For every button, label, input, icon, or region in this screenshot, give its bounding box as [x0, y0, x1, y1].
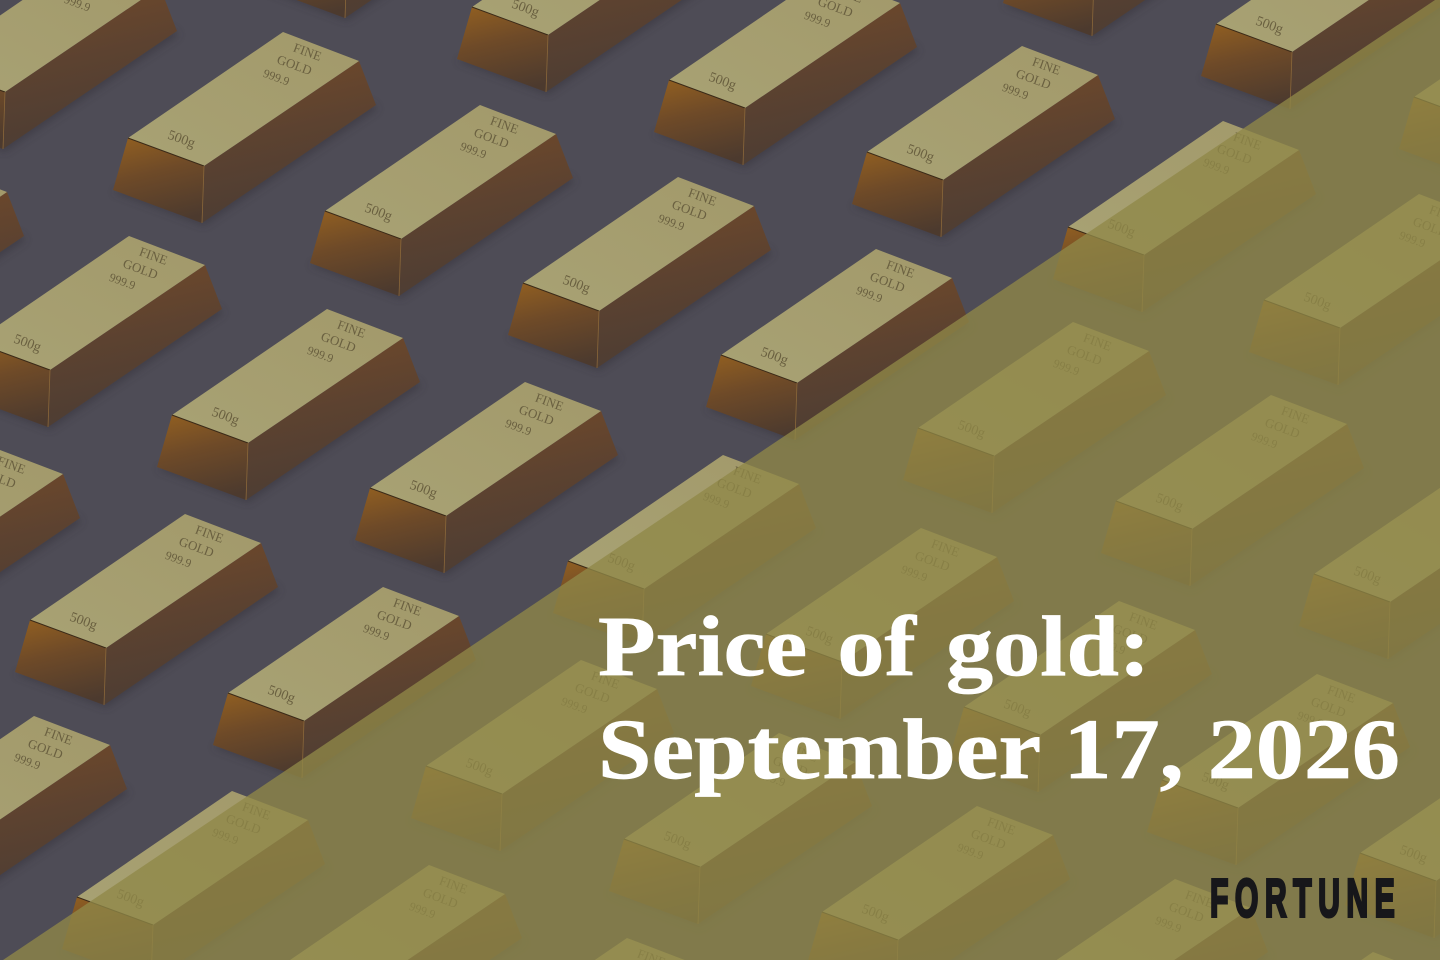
gold bar [1005, 879, 1270, 960]
gold bar [411, 660, 676, 854]
gold bar [259, 865, 524, 960]
gold bar [0, 716, 129, 910]
gold bar [949, 601, 1214, 795]
gold bar [1203, 952, 1440, 960]
gold bar [609, 733, 874, 927]
gold bar [15, 514, 280, 708]
title: Price of gold: [598, 599, 1150, 694]
gold bar [553, 455, 818, 649]
gold bar [706, 249, 971, 443]
gold bar [1003, 0, 1268, 39]
gold bar [310, 105, 575, 299]
Fortune logo: FORTUNE [1210, 868, 1395, 929]
gold bar [0, 445, 82, 639]
gold bar [751, 528, 1016, 722]
gold bar [1345, 747, 1440, 941]
gold bar [1147, 674, 1412, 868]
gold bar [62, 791, 327, 960]
gold bar [903, 322, 1168, 516]
gold bar [457, 0, 722, 95]
gold bar [654, 0, 919, 168]
gold bar [1299, 468, 1440, 662]
gold bar [1399, 0, 1440, 185]
gold bar [1101, 395, 1366, 589]
gold bar [0, 163, 26, 357]
gold bar [355, 382, 620, 576]
gold bar [113, 32, 378, 226]
gold bar [213, 587, 478, 781]
gold bar [157, 309, 422, 503]
gold bar [0, 236, 224, 430]
title: September 17, 2026 [598, 701, 1400, 797]
gold bar [1249, 194, 1440, 388]
gold bar [457, 938, 722, 960]
gold bar [852, 46, 1117, 240]
title [598, 599, 1400, 797]
gold bar [1201, 0, 1440, 112]
gold bar [1053, 121, 1318, 315]
gold bar [807, 806, 1072, 960]
gold bar [508, 177, 773, 371]
gold bar [256, 0, 521, 21]
gold bar [0, 0, 179, 152]
